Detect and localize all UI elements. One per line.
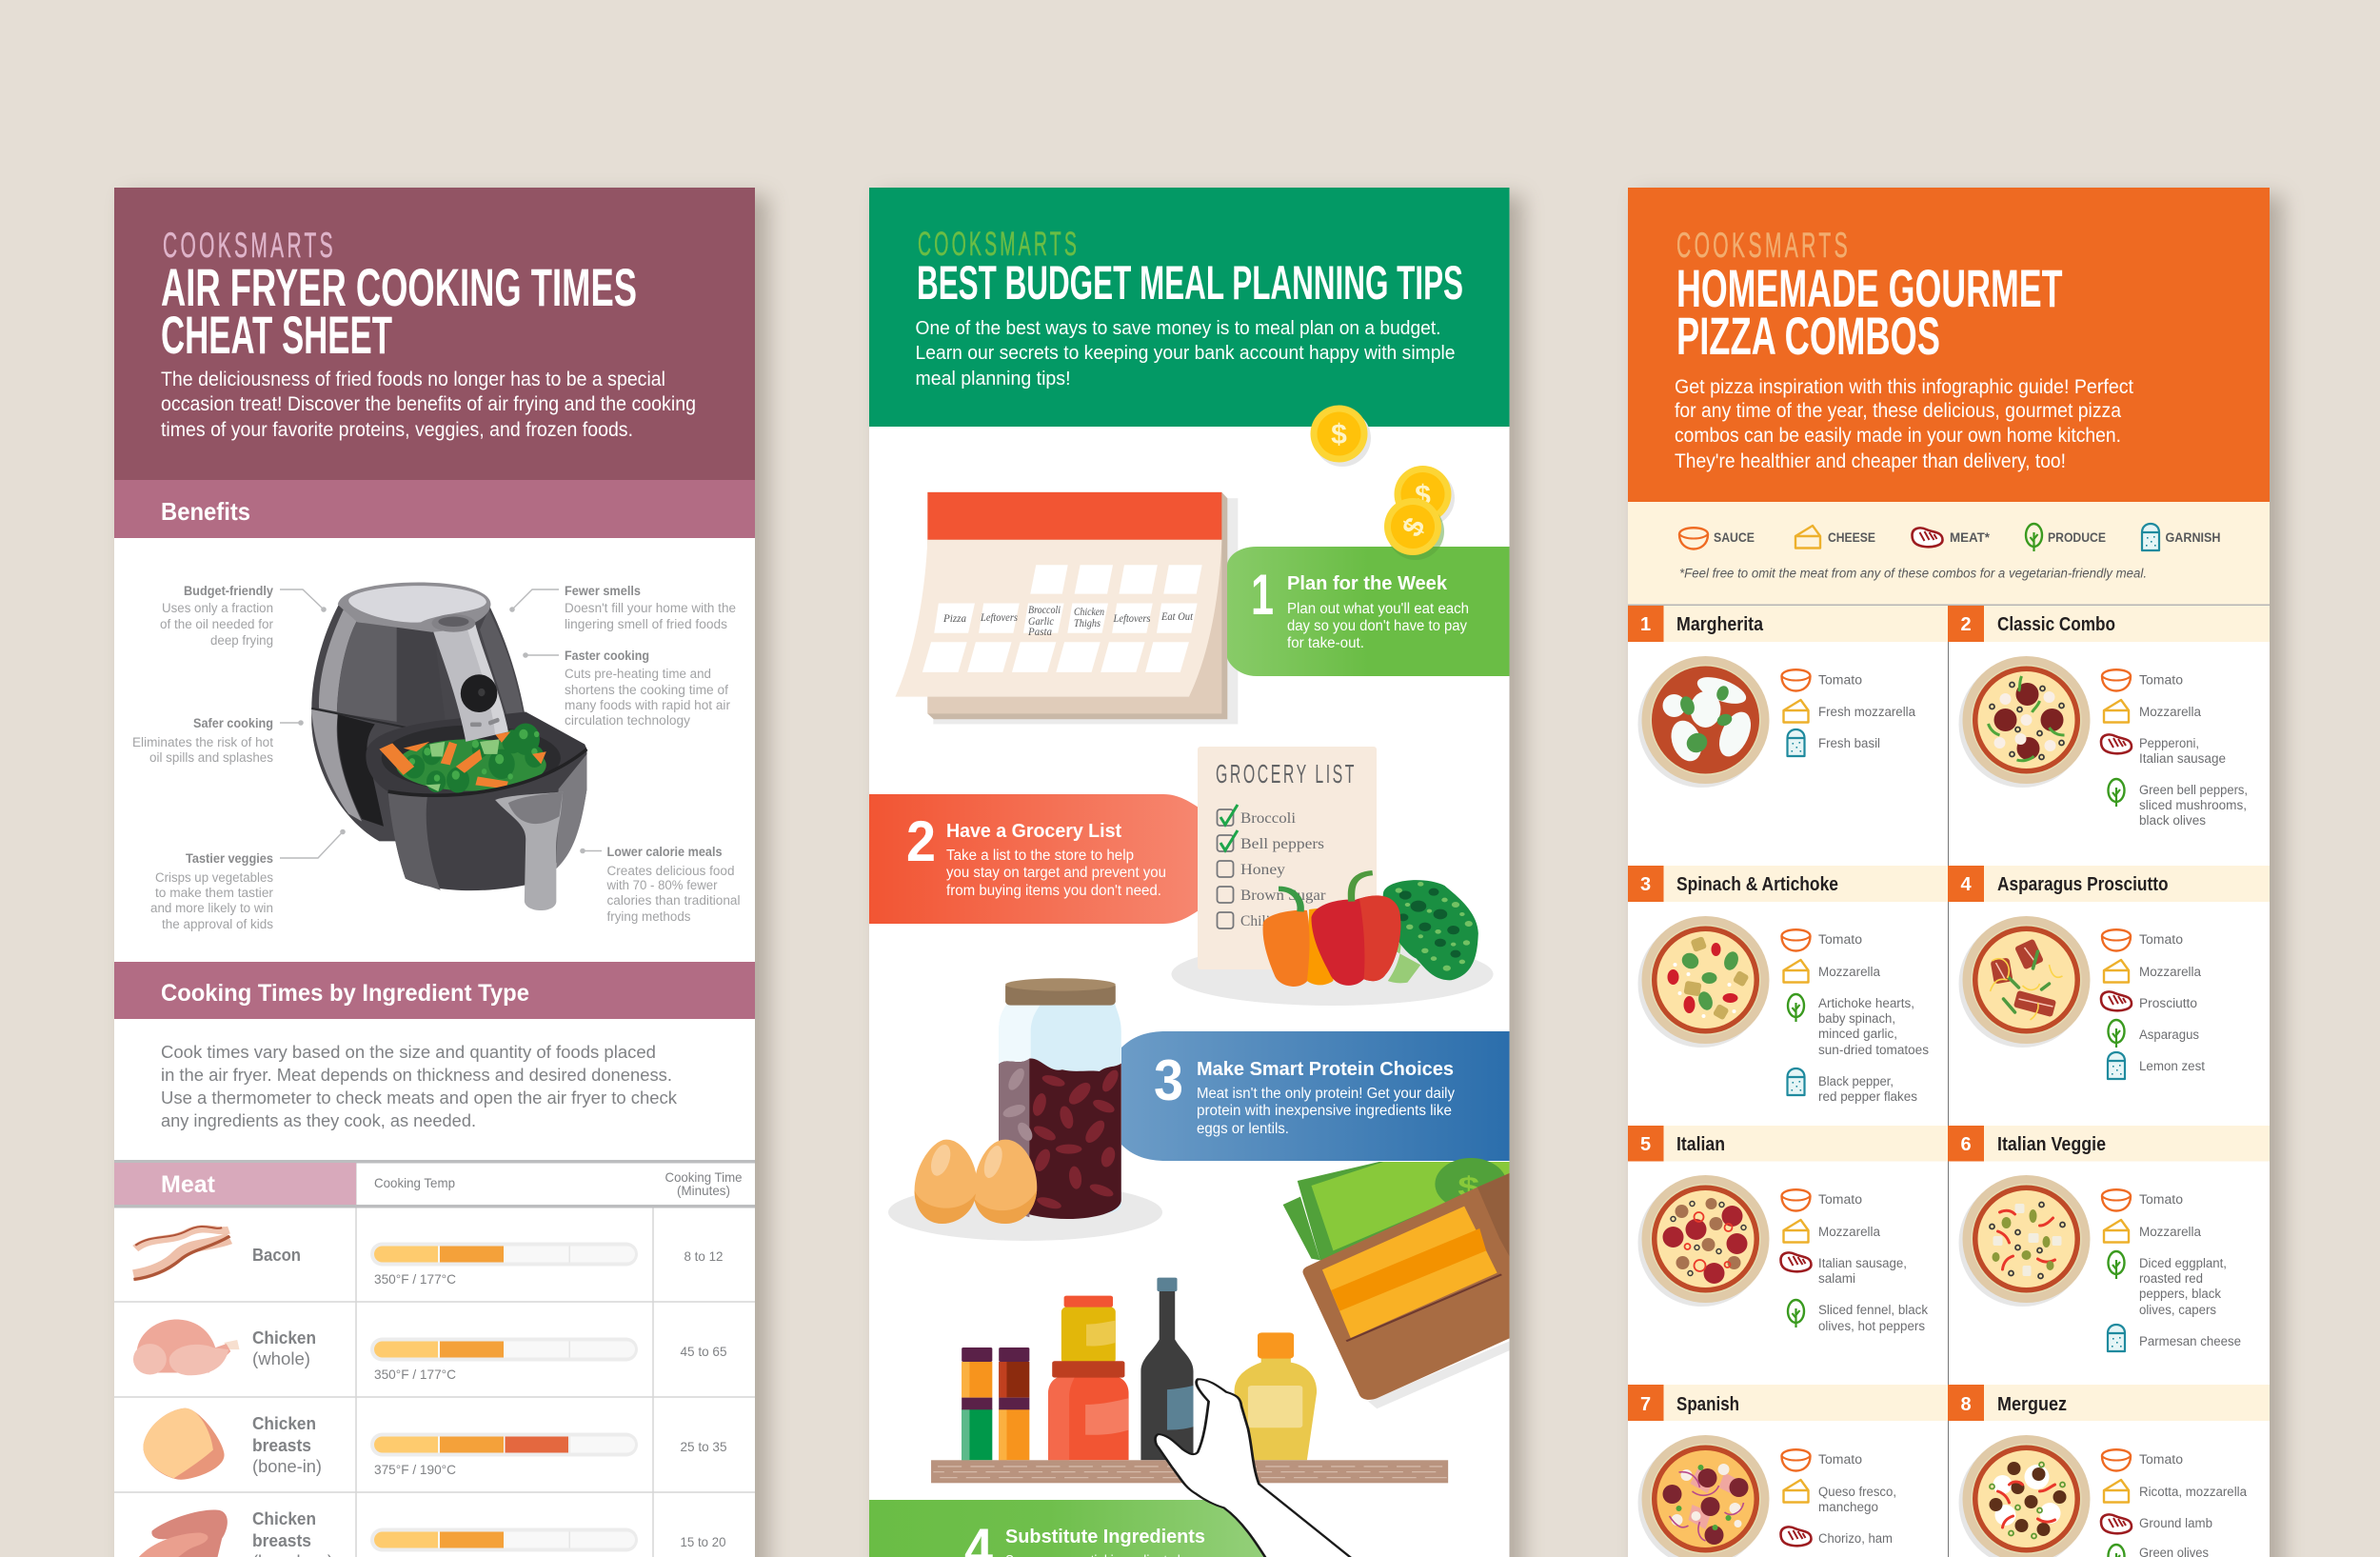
callout: tastier veggies: to make them tastier bbox=[155, 886, 273, 900]
pizza illustration bbox=[1959, 656, 2091, 788]
text: calendar meals: Chicken bbox=[1074, 607, 1104, 618]
ingredients list: Mozzarella bbox=[2139, 965, 2201, 979]
text: cooking times intro bbox=[161, 1043, 678, 1130]
legend: CHEESE bbox=[1828, 530, 1875, 545]
intro text: One of the best ways to save money is to meal plan on a budget. bbox=[916, 317, 1441, 339]
tip 2: have a grocery list: from buying items you don't need. bbox=[946, 883, 1161, 899]
callout: tastier veggies bbox=[150, 829, 346, 931]
icon: bacon bbox=[133, 1227, 229, 1279]
row: chicken breasts bone-in: breasts bbox=[252, 1436, 311, 1455]
tip 3: protein choices: protein with inexpensive ingredients like bbox=[1197, 1103, 1452, 1119]
card: margherita bbox=[1628, 606, 2270, 788]
callout: lower calorie meals: Creates delicious food bbox=[607, 864, 735, 878]
ingredients list: baby spinach, bbox=[1818, 1011, 1895, 1026]
bar: 375F bbox=[370, 1432, 638, 1457]
row: chicken breasts boneless bbox=[139, 1509, 726, 1557]
ingredients list: Italian sausage bbox=[2139, 751, 2226, 766]
ingredients list bbox=[2101, 1449, 2247, 1557]
panel: air fryer cheat sheet bbox=[114, 188, 768, 1557]
ingredients list: Tomato bbox=[1818, 1192, 1862, 1207]
callout: budget-friendly: of the oil needed for bbox=[160, 617, 273, 631]
ingredients list: Diced eggplant, bbox=[2139, 1256, 2227, 1270]
tip 4: substitute ingredients bbox=[869, 1500, 1271, 1557]
callout: fewer smells bbox=[509, 584, 736, 631]
callout: budget-friendly: Budget-friendly bbox=[184, 584, 273, 598]
card: asparagus prosciutto: 4 bbox=[1960, 874, 1972, 895]
header band: pizza bbox=[1628, 188, 2270, 502]
card: margherita: 1 bbox=[1640, 614, 1651, 635]
illustration: pantry shelf and bottles bbox=[931, 1278, 1448, 1483]
panel: pizza combos bbox=[1628, 188, 2283, 1557]
illustration: air fryer bbox=[311, 582, 586, 910]
card: classic combo bbox=[1948, 606, 2248, 828]
card: spanish: Spanish bbox=[1676, 1394, 1739, 1415]
icon: wine bottle bbox=[1140, 1278, 1194, 1460]
card: italian: Italian bbox=[1676, 1134, 1725, 1155]
grocery list note: Honey bbox=[1240, 862, 1285, 878]
tip 4: substitute ingredients: Substitute Ingredients bbox=[1005, 1527, 1205, 1547]
ingredients list: Tomato bbox=[2139, 1452, 2183, 1467]
row: chicken breasts boneless: breasts bbox=[252, 1531, 311, 1550]
illustration: wallet and cash bbox=[1283, 1158, 1513, 1408]
icon: coin stack: $ bbox=[1397, 512, 1432, 542]
ingredients list: Asparagus bbox=[2139, 1028, 2199, 1042]
callout: safer cooking bbox=[132, 716, 304, 765]
icon: spice jars bbox=[962, 1347, 1029, 1460]
grocery list note: Brown Sugar bbox=[1240, 888, 1326, 904]
ingredients list bbox=[1782, 929, 1929, 1104]
tip 2: have a grocery list: Take a list to the store to help bbox=[946, 848, 1134, 864]
callout: fewer smells: Fewer smells bbox=[565, 584, 641, 598]
callout: tastier veggies: Tastier veggies bbox=[186, 851, 273, 866]
intro text: They're healthier and cheaper than delivery, too! bbox=[1675, 450, 2066, 472]
callout: lower calorie meals bbox=[580, 845, 741, 924]
icon: coin top: $ bbox=[1331, 419, 1347, 450]
ingredients list: Black pepper, bbox=[1818, 1074, 1894, 1088]
card: merguez: Merguez bbox=[1997, 1394, 2067, 1415]
logo: COOKSMARTS bbox=[163, 226, 336, 265]
callout: faster cooking: many foods with rapid hot air bbox=[565, 698, 731, 712]
callout: budget-friendly bbox=[160, 584, 327, 648]
callout: safer cooking: Safer cooking bbox=[193, 716, 273, 730]
text: calendar meals: Garlic bbox=[1028, 616, 1054, 628]
pizza illustration bbox=[1637, 656, 1769, 788]
callout: budget-friendly: deep frying bbox=[210, 633, 273, 648]
title: HOMEMADE GOURMET bbox=[1676, 258, 2062, 318]
ingredients list: Mozzarella bbox=[2139, 1225, 2201, 1239]
card: italian veggie bbox=[1948, 1126, 2241, 1351]
tip 1: plan for the week: 1 bbox=[1251, 563, 1274, 627]
intro text bbox=[916, 317, 1455, 389]
callout: lower calorie meals: calories than traditional bbox=[607, 893, 741, 908]
legend: MEAT* bbox=[1950, 530, 1991, 545]
text: calendar meals: Eat Out bbox=[1160, 611, 1194, 623]
illustration: beans jar and eggs bbox=[888, 978, 1162, 1241]
header band: meal planning bbox=[869, 188, 1510, 427]
header band: air fryer bbox=[114, 188, 755, 480]
ingredients list: Tomato bbox=[1818, 932, 1862, 947]
callout: tastier veggies: the approval of kids bbox=[162, 917, 273, 931]
text: calendar meals: Broccoli bbox=[1028, 605, 1061, 616]
title: PIZZA COMBOS bbox=[1676, 306, 1940, 366]
icon: coin top bbox=[1310, 406, 1371, 467]
grocery list note: Broccoli bbox=[1240, 810, 1297, 827]
text: calendar meals: Leftovers bbox=[1113, 613, 1151, 625]
legend: GARNISH bbox=[2165, 530, 2220, 545]
callout: fewer smells: Doesn't fill your home with the bbox=[565, 601, 736, 615]
grocery list note: Chili bbox=[1240, 913, 1271, 929]
callout: tastier veggies: Crisps up vegetables bbox=[155, 870, 273, 885]
tip 1: plan for the week: Plan for the Week bbox=[1287, 573, 1448, 594]
ingredients list: olives, capers bbox=[2139, 1303, 2216, 1317]
intro text: Get pizza inspiration with this infographic guide! Perfect bbox=[1675, 376, 2133, 398]
ingredients list: Mozzarella bbox=[1818, 965, 1880, 979]
heading: cooking times: Cooking Times by Ingredient Type bbox=[161, 980, 529, 1007]
grocery list note: GROCERY LIST bbox=[1216, 759, 1357, 788]
ingredients list: Queso fresco, bbox=[1818, 1485, 1896, 1499]
ingredients list: Tomato bbox=[2139, 672, 2183, 688]
text: calendar meals: Pizza bbox=[942, 613, 966, 625]
callout: faster cooking: Cuts pre-heating time and bbox=[565, 667, 711, 681]
title bbox=[161, 257, 637, 365]
row: chicken whole: 350°F / 177°C bbox=[374, 1367, 456, 1382]
ingredients list: manchego bbox=[1818, 1500, 1878, 1514]
ingredients list: Mozzarella bbox=[1818, 1225, 1880, 1239]
ingredients list: Fresh mozzarella bbox=[1818, 705, 1915, 719]
row: chicken whole: Chicken bbox=[252, 1328, 316, 1347]
intro text: for any time of the year, these delicious, gourmet pizza bbox=[1675, 400, 2121, 422]
tip 3: protein choices: 3 bbox=[1154, 1048, 1183, 1112]
card: spinach and artichoke: 3 bbox=[1640, 874, 1651, 895]
tip 1: plan for the week: for take-out. bbox=[1287, 635, 1364, 651]
icon: coin stack bbox=[1384, 466, 1455, 560]
text: calendar meals bbox=[942, 605, 1194, 638]
ingredients list: Italian sausage, bbox=[1818, 1256, 1907, 1270]
logo: COOKSMARTS bbox=[1676, 226, 1851, 265]
illustration: plate shadow bbox=[1171, 943, 1493, 1006]
tip 1: plan for the week: Plan out what you'll eat each bbox=[1287, 601, 1469, 617]
intro text: combos can be easily made in your own home kitchen. bbox=[1675, 425, 2121, 447]
note: *Feel free to omit the meat from any of these combos for a vegetarian-friendly meal. bbox=[1679, 566, 2147, 581]
ingredients list: Prosciutto bbox=[2139, 996, 2197, 1010]
tip 3: protein choices: eggs or lentils. bbox=[1197, 1121, 1289, 1137]
row: chicken breasts bone-in: Chicken bbox=[252, 1414, 316, 1433]
ingredients list: Sliced fennel, black bbox=[1818, 1303, 1928, 1317]
card: classic combo: Classic Combo bbox=[1997, 614, 2115, 635]
ingredients list: Tomato bbox=[2139, 1192, 2183, 1207]
text: calendar meals: Pasta bbox=[1027, 627, 1052, 638]
card: classic combo: 2 bbox=[1960, 614, 1972, 635]
title: CHEAT SHEET bbox=[161, 305, 392, 365]
row: bacon: Bacon bbox=[252, 1246, 301, 1265]
ingredients list: sliced mushrooms, bbox=[2139, 798, 2247, 812]
tip 3: protein choices: Meat isn't the only protein! Get your daily bbox=[1197, 1086, 1455, 1102]
ingredients list bbox=[2102, 1189, 2241, 1351]
ingredients list bbox=[1782, 669, 1915, 756]
panel: budget meal planning bbox=[869, 188, 1523, 1557]
intro text: meal planning tips! bbox=[916, 368, 1070, 389]
table header: meat: Cooking Temp bbox=[374, 1175, 455, 1190]
intro text bbox=[1675, 376, 2133, 472]
legend bbox=[1628, 502, 2270, 605]
callout: budget-friendly: Uses only a fraction bbox=[162, 601, 273, 615]
row: chicken breasts boneless: Chicken bbox=[252, 1509, 316, 1528]
pizza illustration bbox=[1959, 1435, 2091, 1557]
table: meat cooking times bbox=[114, 1160, 755, 1557]
ingredients list: red pepper flakes bbox=[1818, 1089, 1917, 1104]
row: chicken breasts bone-in: (bone-in) bbox=[252, 1457, 322, 1476]
callout: faster cooking: Faster cooking bbox=[565, 649, 649, 663]
intro text: The deliciousness of fried foods no longer has to be a special bbox=[161, 369, 665, 390]
ingredients list: Tomato bbox=[1818, 1452, 1862, 1467]
tip 3: protein choices: Make Smart Protein Choices bbox=[1197, 1059, 1454, 1080]
ingredients list bbox=[1780, 1449, 1896, 1546]
icon: boneless breast bbox=[139, 1510, 228, 1557]
illustration: wallet and cash: $ bbox=[1458, 1170, 1479, 1203]
shelf bbox=[931, 1460, 1448, 1483]
title bbox=[1676, 258, 2062, 366]
grocery list note bbox=[1198, 747, 1377, 969]
ingredients list: Tomato bbox=[1818, 672, 1862, 688]
ingredients list: Green bell peppers, bbox=[2139, 783, 2248, 797]
callout: lower calorie meals: with 70 - 80% fewer bbox=[606, 878, 718, 892]
ingredients list: Pepperoni, bbox=[2139, 736, 2199, 750]
icon: oil bottle bbox=[1235, 1332, 1317, 1460]
card: spinach and artichoke bbox=[1628, 866, 2270, 1104]
row: chicken whole: 45 to 65 bbox=[680, 1344, 727, 1359]
intro text: occasion treat! Discover the benefits of air frying and the cooking bbox=[161, 393, 696, 415]
row: chicken whole: (whole) bbox=[252, 1349, 310, 1368]
callout: lower calorie meals: Lower calorie meals bbox=[607, 845, 722, 859]
ingredients list: peppers, black bbox=[2139, 1287, 2221, 1301]
text: cooking times intro: Cook times vary based on the size and quantity of foods placed bbox=[161, 1043, 656, 1062]
ingredients list: minced garlic, bbox=[1818, 1027, 1897, 1041]
tip 1: plan for the week: day so you don't have to pay bbox=[1287, 618, 1467, 634]
card: merguez bbox=[1948, 1385, 2247, 1557]
row: chicken breasts bone-in bbox=[143, 1408, 727, 1480]
card: spanish bbox=[1628, 1385, 2270, 1557]
heading: benefits: Benefits bbox=[161, 497, 250, 526]
ingredients list bbox=[2101, 929, 2205, 1079]
text: cooking times intro: any ingredients as they cook, as needed. bbox=[161, 1111, 476, 1130]
intro text: Learn our secrets to keeping your bank account happy with simple bbox=[916, 342, 1455, 364]
card: asparagus prosciutto: Asparagus Prosciutto bbox=[1997, 874, 2169, 895]
card: italian veggie: 6 bbox=[1960, 1134, 1972, 1155]
ingredients list: roasted red bbox=[2139, 1271, 2203, 1286]
illustration: calendar bbox=[895, 492, 1238, 724]
table header: meat: Cooking Time bbox=[664, 1169, 743, 1185]
heading: cooking times bbox=[114, 962, 755, 1019]
tip 2: have a grocery list: you stay on target and prevent you bbox=[946, 865, 1166, 881]
text: cooking times intro: in the air fryer. Meat depends on thickness and desired doneness. bbox=[161, 1066, 672, 1085]
heading: benefits bbox=[114, 480, 755, 538]
callout: tastier veggies: and more likely to win bbox=[150, 901, 273, 915]
title: BEST BUDGET MEAL PLANNING TIPS bbox=[917, 256, 1463, 309]
ingredients list bbox=[2101, 669, 2248, 828]
ingredients list: Fresh basil bbox=[1818, 736, 1880, 750]
illustration: peppers and broccoli bbox=[1263, 873, 1478, 987]
row: chicken breasts bone-in: 375°F / 190°C bbox=[374, 1462, 456, 1477]
ingredients list: Tomato bbox=[2139, 932, 2183, 947]
icon: eggs bbox=[915, 1140, 1037, 1224]
row: bacon: 8 to 12 bbox=[684, 1248, 724, 1264]
ingredients list: Parmesan cheese bbox=[2139, 1334, 2241, 1348]
tip 2: have a grocery list: 2 bbox=[906, 809, 936, 873]
tip 2: have a grocery list bbox=[869, 794, 1201, 924]
intro text: times of your favorite proteins, veggies, and frozen foods. bbox=[161, 419, 633, 441]
tip 1: plan for the week bbox=[1227, 547, 1510, 676]
icon: bone-in breast bbox=[143, 1408, 225, 1480]
callout: fewer smells: lingering smell of fried foods bbox=[565, 617, 727, 631]
ingredients list: Ground lamb bbox=[2139, 1516, 2212, 1530]
pizza illustration bbox=[1637, 1435, 1769, 1557]
ingredients list: Mozzarella bbox=[2139, 705, 2201, 719]
ingredients list: Lemon zest bbox=[2139, 1059, 2205, 1073]
ingredients list: black olives bbox=[2139, 813, 2206, 828]
pizza illustration bbox=[1637, 1175, 1769, 1307]
pizza illustration bbox=[1959, 916, 2091, 1048]
ingredients list bbox=[1780, 1189, 1928, 1333]
callout: safer cooking: Eliminates the risk of hot bbox=[132, 735, 273, 749]
ingredients list: salami bbox=[1818, 1271, 1855, 1286]
row: chicken breasts boneless: 15 to 20 bbox=[680, 1534, 726, 1549]
row: chicken breasts bone-in: 25 to 35 bbox=[680, 1439, 727, 1454]
ingredients list: sun-dried tomatoes bbox=[1818, 1043, 1929, 1057]
card: italian veggie: Italian Veggie bbox=[1997, 1134, 2106, 1155]
legend: SAUCE bbox=[1714, 530, 1755, 545]
table header: meat: (Minutes) bbox=[677, 1183, 730, 1198]
tip 2: have a grocery list: Have a Grocery List bbox=[946, 821, 1121, 842]
table header: meat bbox=[114, 1163, 743, 1205]
ingredients list: Ricotta, mozzarella bbox=[2139, 1485, 2247, 1499]
callout: faster cooking bbox=[523, 649, 731, 728]
text: calendar meals: Thighs bbox=[1074, 618, 1101, 629]
ingredients list: olives, hot peppers bbox=[1818, 1319, 1925, 1333]
title: AIR FRYER COOKING TIMES bbox=[161, 257, 637, 317]
pizza illustration bbox=[1637, 916, 1769, 1048]
row: chicken whole bbox=[133, 1320, 727, 1382]
illustration: hand reaching bbox=[1155, 1379, 1364, 1557]
callout: faster cooking: circulation technology bbox=[565, 713, 690, 728]
card: margherita: Margherita bbox=[1676, 614, 1764, 635]
logo: COOKSMARTS bbox=[918, 226, 1080, 263]
legend: PRODUCE bbox=[2048, 530, 2106, 545]
callout: safer cooking: oil spills and splashes bbox=[149, 750, 273, 765]
icon: sauce jars bbox=[1048, 1296, 1129, 1460]
card: italian: 5 bbox=[1640, 1134, 1651, 1155]
icon: coin stack: $ bbox=[1415, 480, 1431, 511]
text: calendar meals: Leftovers bbox=[980, 612, 1018, 624]
ingredients list: Artichoke hearts, bbox=[1818, 996, 1914, 1010]
row: bacon bbox=[133, 1227, 724, 1287]
card: merguez: 8 bbox=[1960, 1394, 1972, 1415]
pizza illustration bbox=[1959, 1175, 2091, 1307]
grocery list note: Bell peppers bbox=[1240, 836, 1324, 852]
row: bacon: 350°F / 177°C bbox=[374, 1271, 456, 1287]
text: cooking times intro: Use a thermometer to check meats and open the air fryer to check bbox=[161, 1088, 678, 1108]
tip 3: protein choices bbox=[1121, 1031, 1510, 1161]
callout: lower calorie meals: frying methods bbox=[607, 909, 691, 924]
intro text bbox=[161, 369, 696, 441]
card: spanish: 7 bbox=[1640, 1394, 1651, 1415]
callout: faster cooking: shortens the cooking time of bbox=[565, 683, 728, 697]
table header: meat: Meat bbox=[161, 1171, 216, 1198]
ingredients list: Chorizo, ham bbox=[1818, 1531, 1893, 1546]
card: italian bbox=[1628, 1126, 2270, 1333]
card: asparagus prosciutto bbox=[1948, 866, 2205, 1079]
icon: whole chicken bbox=[133, 1320, 240, 1375]
card: spinach and artichoke: Spinach & Artichoke bbox=[1676, 874, 1838, 895]
